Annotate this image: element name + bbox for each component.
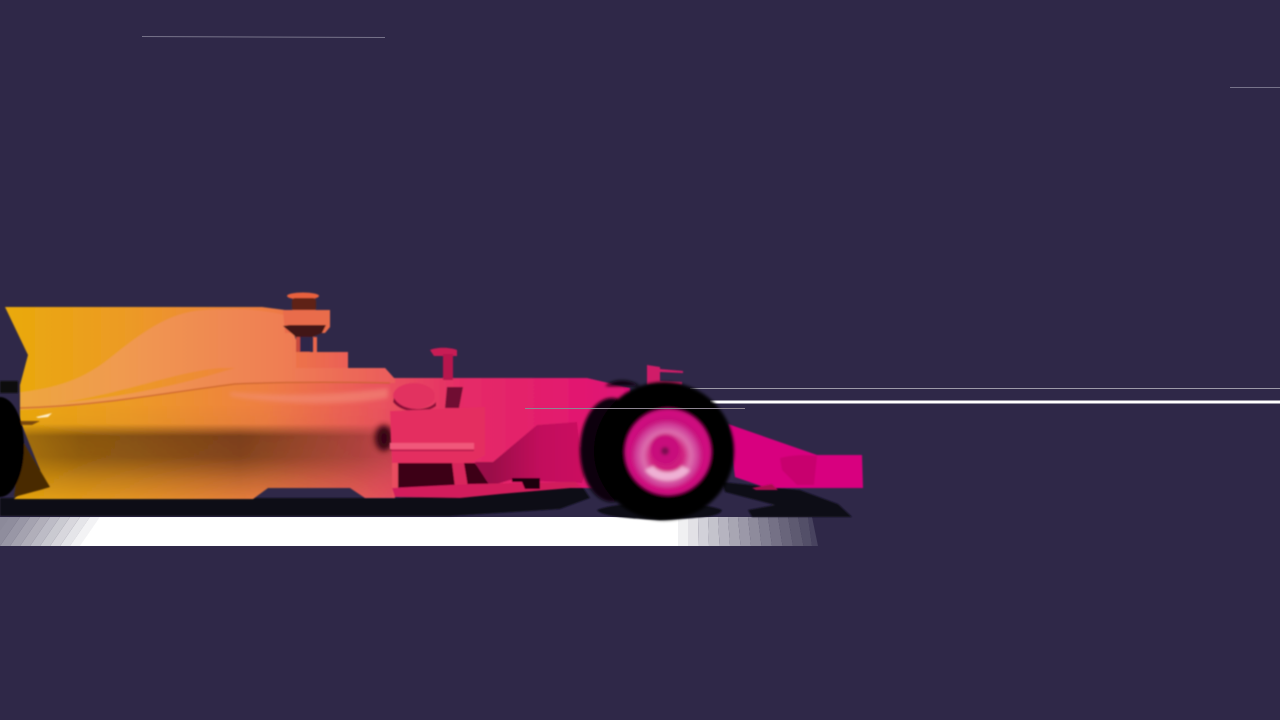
roll hoop edge: [296, 337, 300, 352]
turning vane: [475, 422, 593, 487]
rear suspension arm: [18, 421, 40, 425]
endplate shadow: [780, 455, 817, 485]
lower side panel: [390, 407, 485, 463]
rear diffuser shadow: [14, 440, 50, 497]
rim outer: [625, 409, 711, 495]
rear wing dark mount: [0, 381, 18, 393]
rim lower highlight: [645, 466, 690, 480]
sidepod highlight: [230, 388, 388, 403]
sidepod inlet shadow: [375, 425, 393, 451]
mirror stalk: [443, 354, 453, 380]
wing slot: [752, 484, 778, 490]
sidepod dark shading: [0, 405, 392, 500]
side panel stripe line: [390, 450, 474, 451]
illustration: racing car on dark background: [0, 36, 1280, 546]
T-wing: [647, 365, 683, 385]
intake box: [283, 310, 330, 333]
mirror head: [430, 348, 457, 356]
floor edge: [392, 482, 582, 498]
tyre: [594, 382, 734, 520]
rim light ring: [631, 416, 703, 488]
main bodywork silhouette: [5, 307, 640, 499]
hub centre: [661, 447, 669, 455]
rear wheel and gearbox: [0, 381, 52, 497]
front wheel: [580, 380, 734, 520]
cockpit dark opening: [445, 387, 463, 408]
crease line: [20, 382, 390, 408]
cockpit bump shadow: [393, 398, 436, 412]
inner tyre behind: [580, 398, 644, 502]
highlight glint: [36, 413, 52, 418]
engine cover swoosh: [15, 309, 296, 408]
intake dark underside: [283, 325, 326, 337]
upper sidepod band: [15, 368, 395, 410]
car shadow: [0, 482, 852, 520]
floor strut: [452, 463, 468, 487]
rear tyre: [0, 397, 24, 497]
side panel stripe: [390, 443, 474, 449]
nose and front wing: [728, 424, 863, 488]
car body: [0, 292, 863, 500]
track highlight: [0, 517, 818, 546]
floor dark area: [398, 463, 490, 489]
roll hoop gap right: [313, 337, 317, 352]
floor slot: [512, 478, 540, 489]
intake cap: [287, 292, 319, 300]
speed lines: [142, 36, 1280, 402]
bodywork shading: [0, 309, 395, 500]
cockpit bump: [393, 383, 435, 409]
roll hoop gap: [300, 337, 310, 352]
hub: [650, 434, 680, 464]
tyre top behind: [605, 380, 640, 386]
overlay speed line: [525, 408, 745, 410]
intake neck: [292, 298, 316, 311]
